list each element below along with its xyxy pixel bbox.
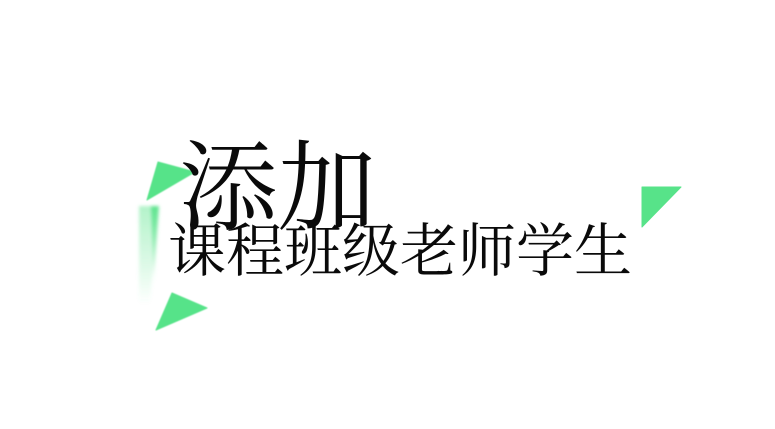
subtitle: 课程班级老师学生: [168, 219, 632, 284]
title: 添加: [179, 135, 376, 244]
icon: triangle top left: [147, 162, 195, 200]
icon: motion streak: [139, 206, 159, 304]
icon: triangle right: [642, 187, 681, 227]
icon: triangle bottom left: [156, 293, 207, 330]
